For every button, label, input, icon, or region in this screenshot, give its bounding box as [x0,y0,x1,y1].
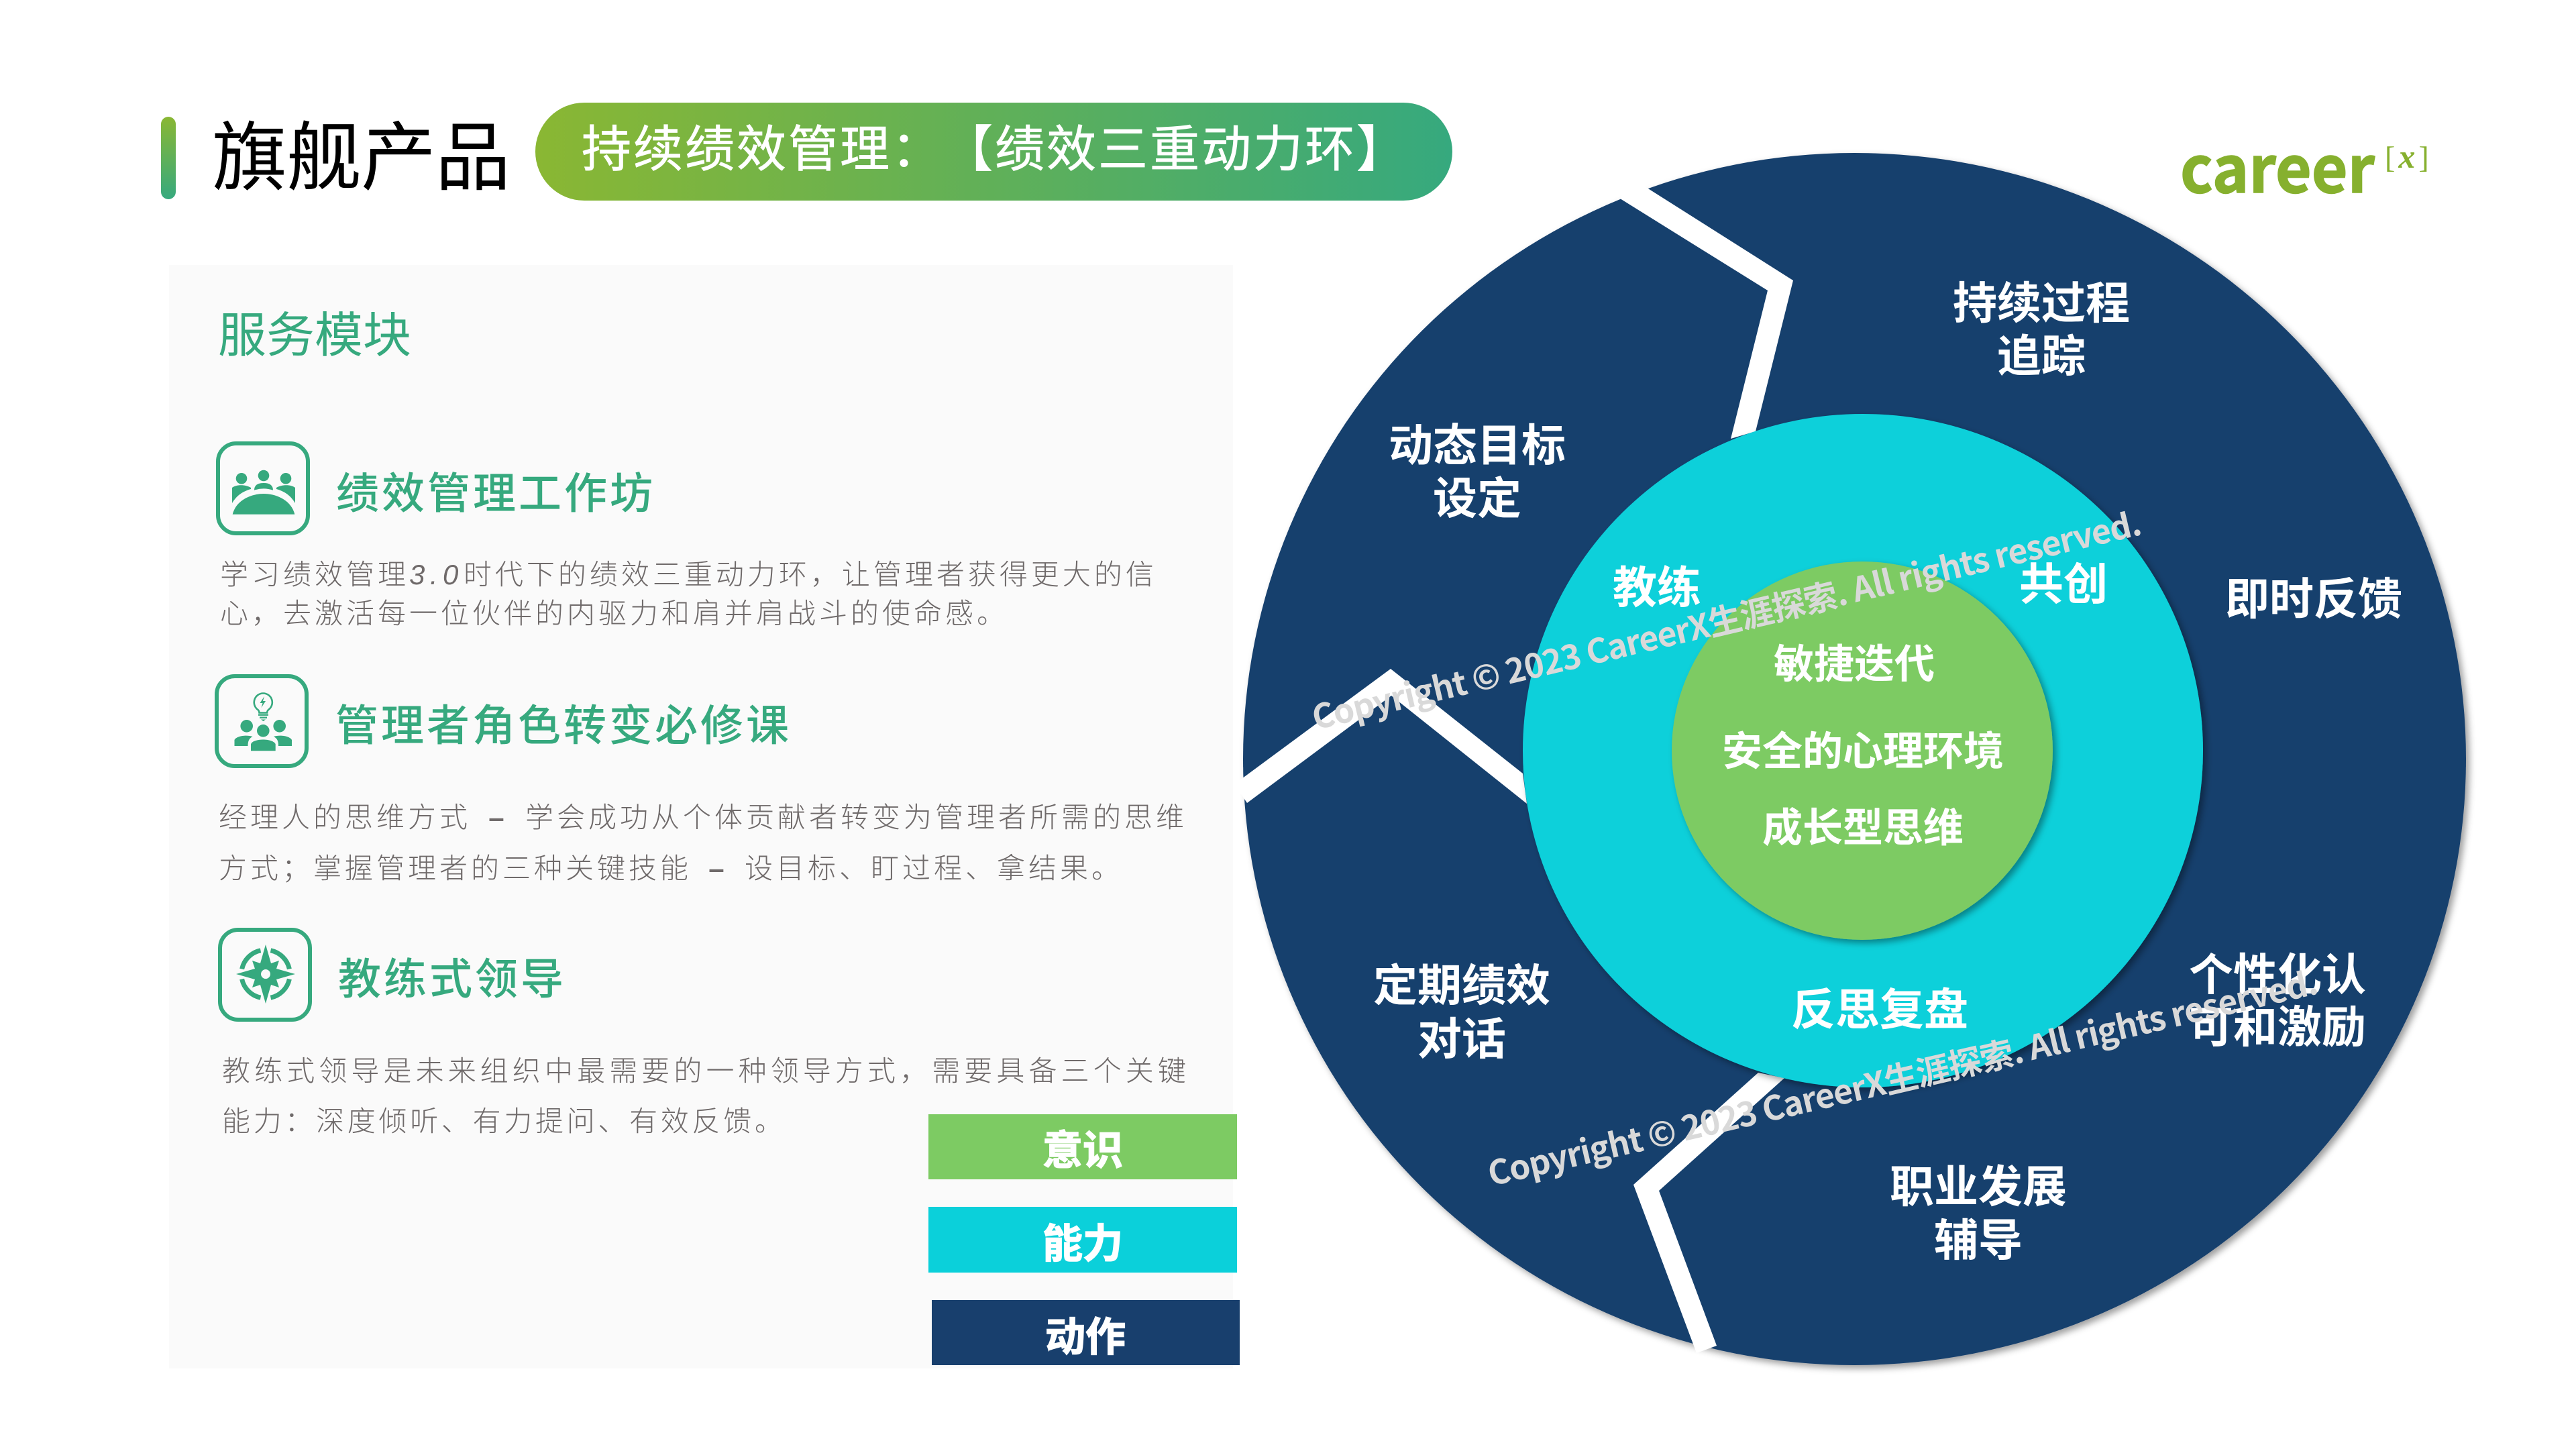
text: coaching description [222,1049,1190,1140]
middle ring: ability [1523,414,2203,1087]
text: manager transition description [219,795,1187,887]
chart: three-ring dynamic cycle [1234,153,2466,1365]
heading: manager transition: 管理者角色转变必修课 [335,692,792,753]
label: personalized recognition: 个性化认 [2189,939,2366,1004]
text: coaching description: 教练式领导是未来组织中最需要的一种领导方式，需要具备三个关键 [222,1049,1190,1089]
legend: awareness: 意识 [1042,1118,1123,1177]
label: psychological safety: 安全的心理环境 [1722,719,2004,777]
legend: awareness [928,1114,1237,1179]
label: regular performance talks [1373,950,1550,1068]
label: regular performance talks: 定期绩效 [1373,950,1550,1014]
logo: career [2180,118,2375,211]
watermark 2: Copyright © 2023 CareerX生涯探索. All rights reserved. [1483,956,2322,1196]
arrow: left segment divider [1234,669,1527,804]
legend: ability [928,1207,1237,1273]
label: career development: 职业发展 [1890,1151,2067,1216]
text: workshop description [220,552,1157,632]
legend: ability: 能力 [1042,1212,1123,1270]
inner circle: awareness [1672,561,2053,940]
icon: team with lightbulb [217,676,307,766]
label: personalized recognition: 可和激励 [2189,991,2366,1056]
heading: workshop: 绩效管理工作坊 [336,460,655,521]
subtitle pill: 持续绩效管理： 【绩效三重动力环】 [582,109,1408,181]
legend: action: 动作 [1045,1305,1126,1363]
label: dynamic goal setting: 设定 [1433,463,1521,527]
label: instant feedback: 即时反馈 [2225,564,2402,628]
label: continuous tracking [1953,268,2130,385]
text: workshop description: 学习绩效管理3.0时代下的绩效三重动力环，让管理者获得更大的信 [220,552,1157,593]
text: workshop description: 心，去激活每一位伙伴的内驱力和肩并肩战斗的使命感。 [220,591,1008,632]
panel heading: 服务模块 [218,296,411,366]
label: coaching: 教练 [1613,552,1701,616]
label: growth mindset: 成长型思维 [1762,796,1964,854]
label: career development: 辅导 [1934,1205,2023,1269]
label: continuous tracking: 持续过程 [1953,268,2130,332]
subtitle pill [535,103,1452,201]
title: 旗舰产品 [212,97,510,206]
label: dynamic goal setting: 动态目标 [1389,410,1566,474]
label: personalized recognition [2189,939,2366,1056]
title accent bar [161,117,176,199]
watermark 1: Copyright © 2023 CareerX生涯探索. All rights reserved. [1307,497,2145,740]
arrow: top segment divider [1620,178,1793,439]
text: manager transition description: 经理人的思维方式 – 学会成功从个体贡献者转变为管理者所需的思维 [219,795,1187,836]
label: co-creation: 共创 [2019,549,2108,613]
label: agile iteration: 敏捷迭代 [1774,632,1935,690]
legend: action [932,1300,1240,1365]
text: manager transition description: 方式；掌握管理者的三种关键技能 – 设目标、盯过程、拿结果。 [219,846,1123,887]
logo: [x] [2385,138,2429,175]
label: continuous tracking: 追踪 [1997,321,2086,385]
arrow: bottom segment divider [1633,1073,1784,1353]
label: dynamic goal setting [1389,410,1566,527]
icon: compass [220,930,310,1020]
outer ring: action [1243,153,2466,1365]
icon: team at table [218,443,308,533]
label: career development [1890,1151,2067,1269]
heading: coaching leadership: 教练式领导 [338,945,566,1007]
panel: service modules [169,265,1233,1368]
text: coaching description: 能力：深度倾听、有力提问、有效反馈。 [222,1099,786,1140]
label: regular performance talks: 对话 [1417,1004,1506,1068]
label: reflection: 反思复盘 [1791,974,1968,1038]
